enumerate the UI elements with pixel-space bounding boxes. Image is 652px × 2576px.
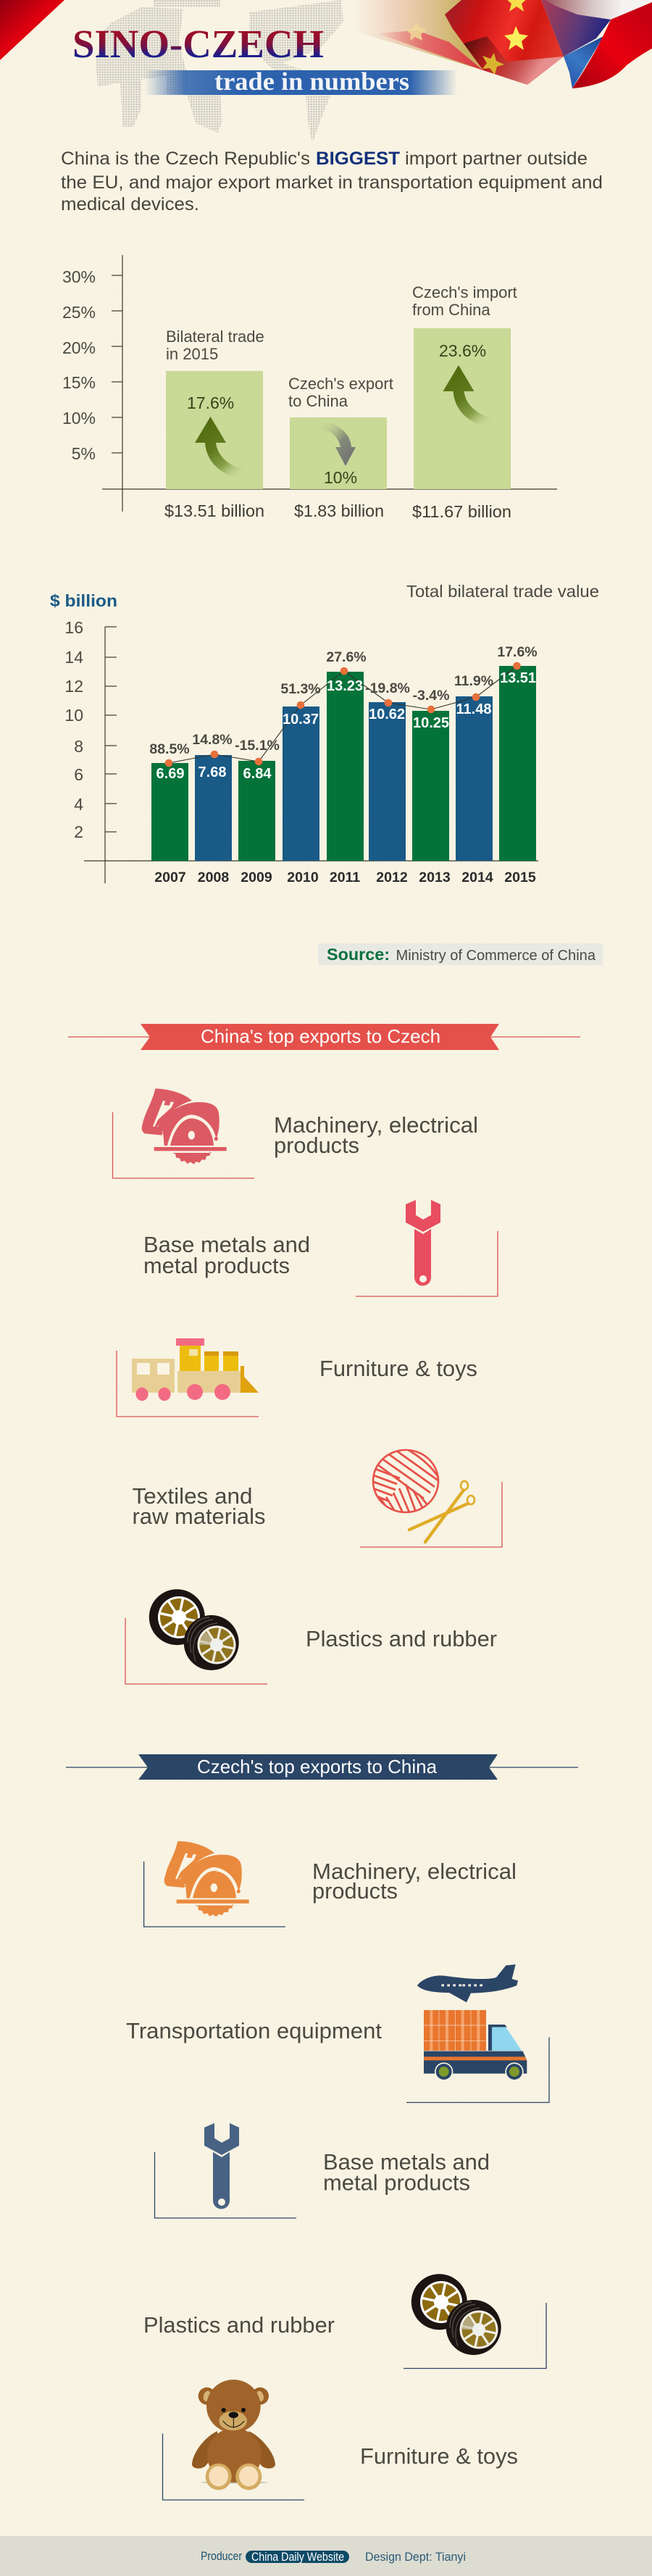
- growth percentages: -15.1%: [235, 738, 280, 754]
- growth percentages: 11.9%: [454, 673, 493, 689]
- section ribbon: Czech's top exports: [66, 1754, 578, 1780]
- label: Textiles and: [132, 1483, 252, 1509]
- Czech blue band: [564, 36, 603, 88]
- icon: wrench: [204, 2123, 239, 2209]
- design credit: Design Dept: Tianyi: [365, 2550, 466, 2564]
- bar values: 6.69: [156, 766, 184, 782]
- arrow up: Czech import: [443, 365, 494, 427]
- airplane: [417, 1964, 518, 2002]
- unit label: $ billion: [50, 591, 117, 610]
- bar values: 10.62: [369, 706, 405, 722]
- ribbon text: China's top exports to Czech: [201, 1025, 440, 1047]
- star: small faded: [406, 22, 427, 41]
- label: Czech import: Czech's import: [412, 283, 517, 301]
- label: [132, 1483, 265, 1529]
- bar values: 6.84: [243, 766, 272, 782]
- growth percentages: 27.6%: [326, 649, 367, 665]
- year labels: 2011: [330, 870, 360, 885]
- star: middle: [504, 26, 528, 50]
- y-axis numbers: 8: [74, 737, 83, 756]
- source box: [318, 943, 603, 965]
- label: Machinery, electrical: [274, 1112, 478, 1138]
- year labels: 2007: [154, 870, 186, 885]
- y-axis numbers: 16: [64, 618, 83, 637]
- intro text: BIGGEST: [316, 149, 400, 169]
- Czech red band: [572, 2, 652, 88]
- producer label: Producer: [201, 2549, 242, 2563]
- icon: circular saw: [164, 1841, 249, 1917]
- label: Czech import: from China: [412, 301, 490, 319]
- y-axis labels: 15%: [62, 373, 96, 392]
- ribbon text: Czech's top exports to China: [197, 1756, 438, 1777]
- label: raw materials: [132, 1504, 265, 1529]
- label: Furniture & toys: [360, 2443, 518, 2469]
- year labels: 2009: [241, 870, 272, 885]
- intro text: medical devices.: [61, 194, 199, 214]
- flags of China and the Czech Republic: [348, 0, 652, 88]
- intro text: the EU, and major export market in transportation equipment and: [61, 172, 603, 193]
- label: Transportation equipment: [126, 2018, 382, 2043]
- y-axis numbers: [64, 618, 83, 841]
- source label: Source:: [327, 945, 390, 964]
- star: top: [505, 0, 528, 12]
- bar values: 10.37: [283, 712, 319, 728]
- dotted world map: [96, 0, 343, 143]
- lower red fold: [377, 30, 483, 70]
- growth percentages: [149, 644, 538, 757]
- year labels: 2010: [287, 870, 319, 885]
- icon: airplane and truck: [417, 1964, 527, 2081]
- label: [274, 1112, 478, 1158]
- item: base metals (China): [143, 1200, 498, 1296]
- growth percentages: 14.8%: [192, 732, 233, 748]
- label: [323, 2149, 490, 2196]
- label: Furniture & toys: [319, 1356, 477, 1381]
- year labels: 2015: [504, 870, 536, 885]
- item: plastics and rubber (China): [125, 1589, 497, 1684]
- main red fold: [445, 0, 564, 85]
- percent: 17.6: 17.6%: [187, 393, 234, 412]
- bar: Czech export: [290, 417, 387, 489]
- subtitle banner: [145, 67, 457, 96]
- value: bilateral: $13.51 billion: [164, 501, 264, 520]
- item: base metals (Czech): [155, 2123, 490, 2218]
- year labels: [154, 870, 536, 885]
- shaded lower edge: [464, 36, 564, 85]
- intro text: import partner outside: [405, 149, 588, 169]
- growth percentages: 17.6%: [497, 644, 538, 660]
- y-axis numbers: 14: [64, 648, 83, 667]
- label: [143, 1232, 310, 1278]
- y-axis labels: 10%: [62, 409, 96, 428]
- bar values: 13.23: [327, 678, 363, 694]
- growth percentages: 51.3%: [280, 681, 321, 697]
- label: [312, 1859, 517, 1904]
- label: Machinery, electrical: [312, 1859, 517, 1884]
- bar values: 13.51: [500, 670, 536, 686]
- producer pill: China Daily Website: [251, 2550, 344, 2564]
- year labels: 2008: [198, 870, 229, 885]
- bars: [151, 666, 536, 861]
- truck: [424, 2010, 527, 2081]
- item: plastics and rubber (Czech): [143, 2274, 546, 2368]
- y-axis labels: 20%: [62, 338, 96, 357]
- bar values: 11.48: [456, 701, 491, 717]
- y-axis numbers: 2: [74, 822, 83, 841]
- y-axis numbers: 4: [74, 795, 83, 814]
- item: textiles (China): [132, 1445, 502, 1547]
- title: SINO-CZECH: [72, 22, 324, 66]
- growth percentages: -19.8%: [365, 680, 410, 696]
- section ribbon: China's top exports: [68, 1024, 580, 1050]
- item: transportation (Czech): [126, 1964, 549, 2103]
- year labels: 2013: [419, 870, 451, 885]
- arrow up: bilateral trade: [195, 417, 246, 478]
- y-axis numbers: 12: [64, 677, 83, 696]
- growth percentages: 88.5%: [149, 741, 190, 757]
- star: lower: [482, 53, 504, 75]
- label: Plastics and rubber: [306, 1626, 497, 1651]
- year labels: 2012: [376, 870, 408, 885]
- percent: 10: 10%: [324, 468, 357, 487]
- footer: [0, 2536, 652, 2576]
- total trade bar chart: [50, 582, 599, 885]
- label: products: [312, 1878, 398, 1904]
- value: export: $1.83 billion: [294, 501, 384, 520]
- label: Plastics and rubber: [143, 2312, 335, 2338]
- icon: teddy bear: [192, 2380, 275, 2490]
- intro text: China is the Czech Republic's: [61, 149, 310, 169]
- icon: yarn ball and needles: [369, 1445, 475, 1542]
- arrow down: Czech export: [320, 422, 356, 466]
- bar: bilateral trade: [166, 371, 263, 489]
- red corner ribbon: [0, 0, 64, 60]
- growth line: [169, 666, 517, 763]
- y-axis labels: [62, 267, 96, 463]
- label: metal products: [323, 2169, 470, 2196]
- icon: tyres: [411, 2274, 501, 2355]
- label: products: [274, 1133, 359, 1158]
- y-axis labels: 5%: [72, 444, 96, 463]
- Czech violet band: [541, 0, 611, 57]
- year labels: 2014: [461, 870, 493, 885]
- item: machinery (Czech): [144, 1841, 517, 1927]
- item: furniture and toys (China): [117, 1338, 477, 1417]
- label: Base metals and: [323, 2149, 490, 2175]
- growth bar chart: [62, 255, 557, 521]
- item: machinery (China): [113, 1088, 478, 1178]
- y-axis numbers: 6: [74, 765, 83, 784]
- label: bilateral trade: in 2015: [166, 345, 218, 363]
- value: import: $11.67 billion: [412, 502, 511, 521]
- source name: Ministry of Commerce of China: [396, 948, 596, 964]
- label: Czech export: to China: [288, 392, 348, 410]
- bar values: [156, 670, 536, 782]
- bar values: 10.25: [413, 715, 449, 731]
- icon: tyres: [149, 1589, 239, 1670]
- intro text: [61, 149, 603, 214]
- label: Base metals and: [143, 1232, 310, 1257]
- y-axis labels: 30%: [62, 267, 96, 286]
- icon: toy train: [132, 1338, 259, 1401]
- bar: Czech import: [414, 328, 511, 489]
- y-axis labels: 25%: [62, 303, 96, 322]
- chart title: Total bilateral trade value: [406, 582, 599, 601]
- subtitle text: trade in numbers: [214, 67, 409, 96]
- faded Chinese flag: [348, 0, 483, 70]
- y-axis numbers: 10: [64, 706, 83, 725]
- icon: circular saw: [142, 1088, 227, 1164]
- Czech white band: [546, 0, 652, 20]
- percent: 23.6: 23.6%: [439, 341, 486, 360]
- bar values: 7.68: [198, 764, 226, 780]
- growth dots: [165, 662, 521, 767]
- icon: wrench: [406, 1200, 440, 1285]
- item: furniture and toys (Czech): [162, 2380, 518, 2500]
- label: Czech export: Czech's export: [288, 375, 393, 393]
- growth percentages: -3.4%: [413, 688, 449, 704]
- label: metal products: [143, 1253, 290, 1278]
- label: bilateral trade: Bilateral trade: [166, 328, 264, 346]
